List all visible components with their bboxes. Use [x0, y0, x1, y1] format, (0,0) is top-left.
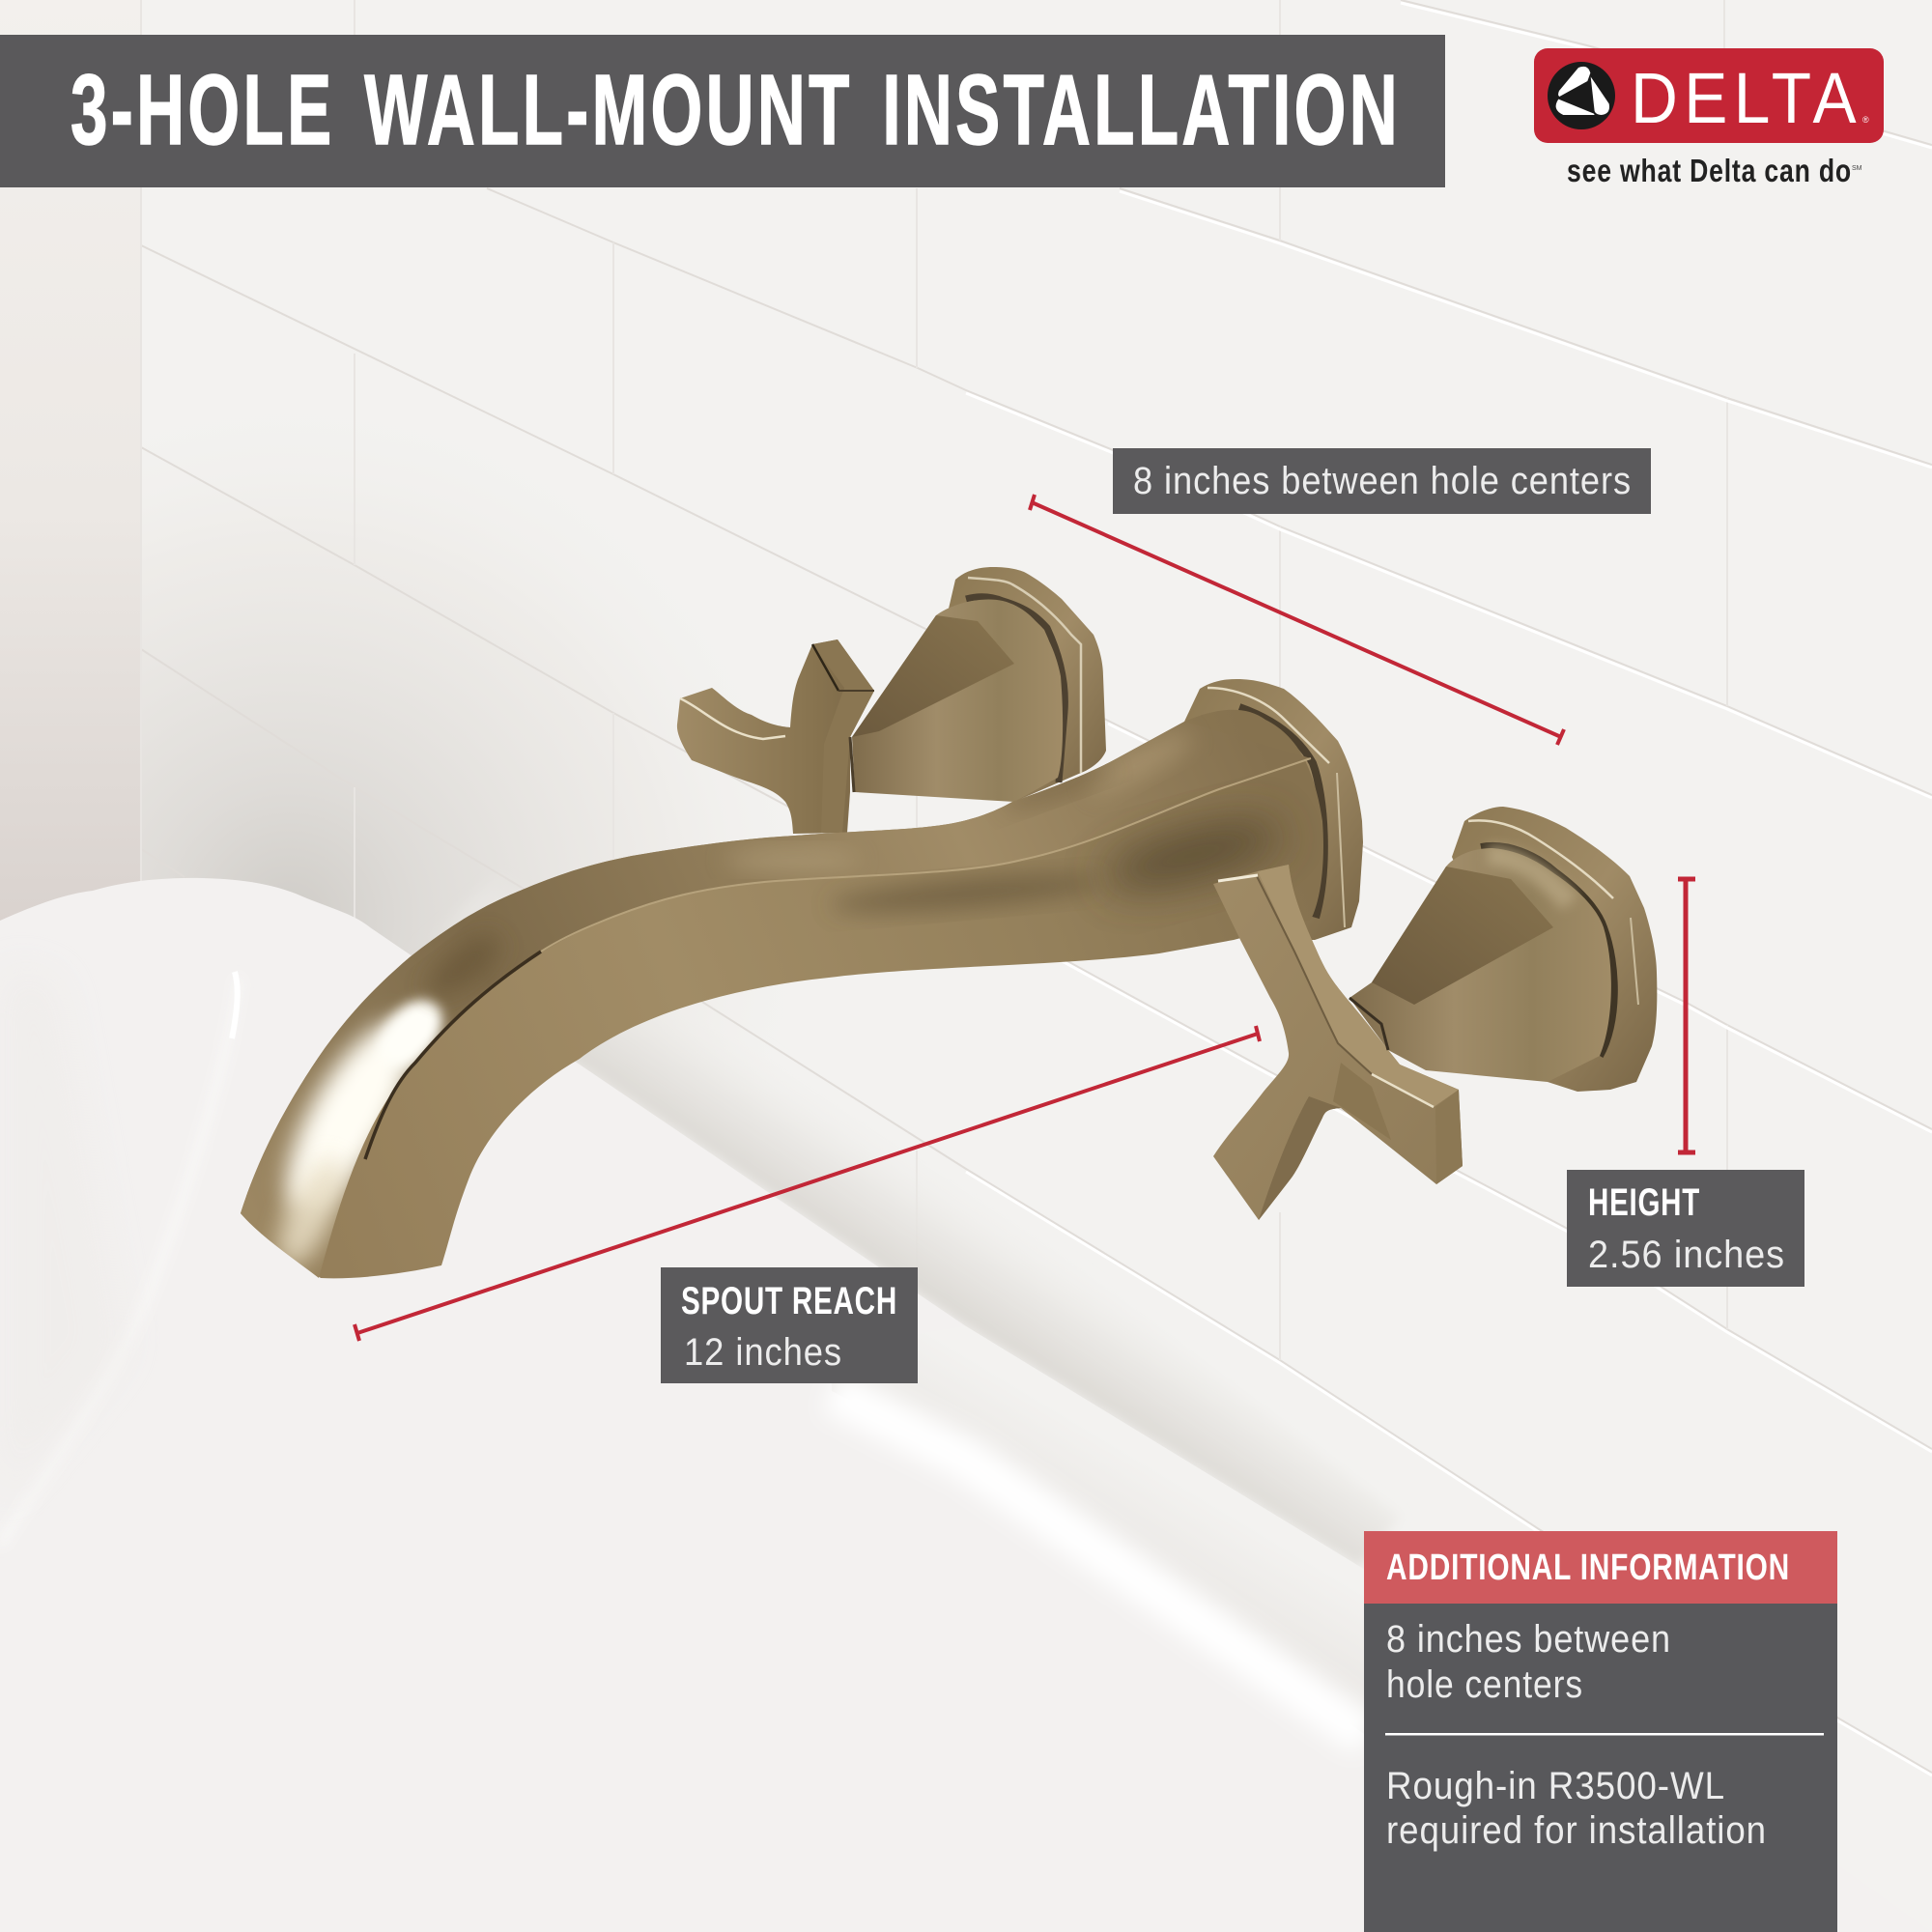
- logo wordmark: DELTA: [1631, 58, 1862, 138]
- panel header: [1364, 1531, 1837, 1604]
- front valve escutcheon: [1452, 807, 1657, 1092]
- info: hole centers: 8 inches between: [1386, 1618, 1671, 1661]
- logo tagline: see what Delta can do: [1567, 153, 1852, 188]
- title banner: [0, 35, 1445, 187]
- front valve dome: [1350, 848, 1611, 1082]
- info: hole centers: [1386, 1618, 1671, 1706]
- callout: height: 2.56 inches: [1588, 1234, 1785, 1276]
- dimension line: height: [1678, 879, 1695, 1152]
- spout highlight: [267, 939, 495, 1271]
- icon: Delta triangle mark: [1548, 62, 1615, 129]
- service mark: SM: [1852, 165, 1862, 172]
- Delta logo: [1534, 48, 1884, 188]
- info: rough-in: Rough-in R3500-WL: [1386, 1765, 1725, 1807]
- back valve dark facet: [852, 615, 1014, 737]
- back cross handle: [677, 639, 874, 834]
- back valve escutcheon: [949, 567, 1106, 802]
- info: rough-in: required for installation: [1386, 1809, 1767, 1852]
- spout: [241, 710, 1323, 1278]
- panel: additional information: [1364, 1531, 1837, 1932]
- callout: 8 inches between hole centers: 8 inches between hole centers: [1133, 460, 1632, 502]
- info: rough-in: [1386, 1765, 1767, 1852]
- dimension line: 8 inches between hole centers: [1030, 495, 1564, 745]
- registered mark: ®: [1862, 115, 1869, 125]
- tub shadow on wall: [412, 850, 1401, 1567]
- callout: 8 inches between hole centers: [1113, 448, 1651, 514]
- callout: spout reach: [661, 1267, 918, 1383]
- tub: [0, 878, 1932, 1932]
- back valve: left handle: [677, 567, 1106, 834]
- front valve dark facet: [1372, 867, 1553, 1005]
- back valve dome: [852, 600, 1063, 802]
- front dome highlight: [1488, 855, 1570, 903]
- callout: height: [1567, 1170, 1804, 1287]
- panel header: ADDITIONAL INFORMATION: [1386, 1548, 1790, 1588]
- spout upper face: [241, 722, 1311, 1278]
- spout lower shading: [724, 724, 1288, 919]
- spout escutcheon: [1184, 679, 1363, 940]
- callout: spout reach: SPOUT REACH: [681, 1280, 897, 1322]
- info: hole centers: hole centers: [1386, 1663, 1583, 1706]
- callout: height: HEIGHT: [1588, 1181, 1700, 1224]
- callout: spout reach: 12 inches: [684, 1331, 842, 1374]
- front cross handle: [1213, 865, 1463, 1220]
- front valve: right handle: [1213, 807, 1657, 1220]
- dimension line: spout reach: [355, 1026, 1260, 1341]
